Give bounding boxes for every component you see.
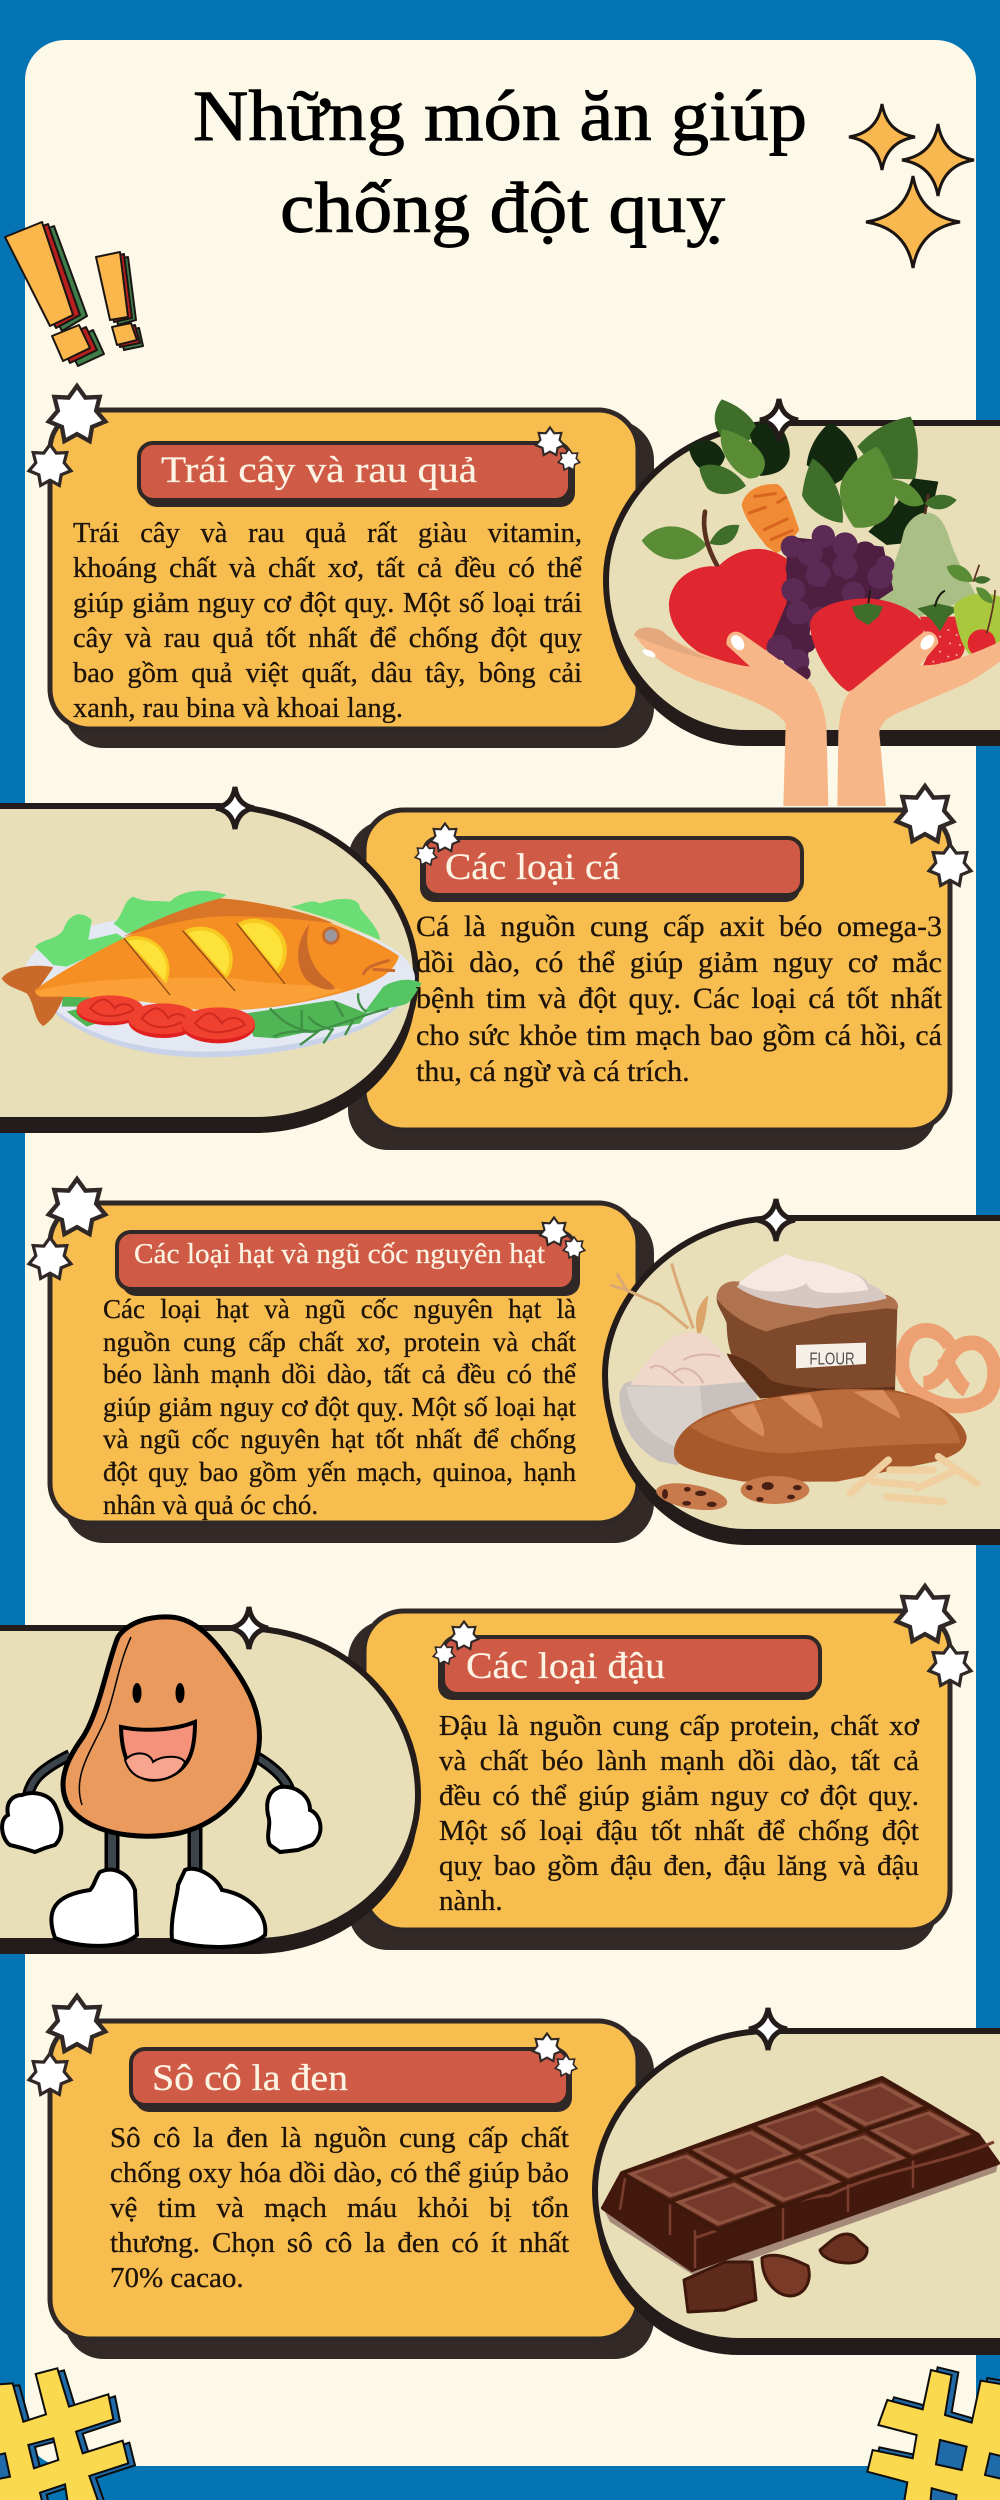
icon: small stars, grains card bbox=[540, 1218, 585, 1258]
illustration: flour sack, bread and grains: FLOUR bbox=[809, 1348, 855, 1368]
icon: large stars, chocolate card bbox=[29, 1996, 105, 2094]
text block: beans bbox=[438, 1710, 920, 1917]
picture frame: chocolate bbox=[595, 2031, 1000, 2355]
text block: nuts and grains: Các loại hạt và ngũ cốc nguyên hạt là bbox=[103, 1294, 576, 1324]
icon: frame sparkle bbox=[757, 1199, 795, 1241]
icon: small stars, fruit card bbox=[536, 428, 580, 470]
text block: fish: thu, cá ngừ và cá trích. bbox=[416, 1055, 690, 1088]
panel: fish card bbox=[348, 810, 950, 1150]
icon: large stars, grains card bbox=[29, 1179, 105, 1278]
icon: small stars, beans card bbox=[433, 1622, 478, 1664]
panel: fruit and vegetables card bbox=[50, 410, 654, 748]
text block: dark chocolate bbox=[110, 2122, 570, 2294]
text block: dark chocolate: Sô cô la đen là nguồn cung cấp chất bbox=[110, 2122, 569, 2154]
picture frame: grains bbox=[605, 1218, 1000, 1545]
text block: fruit and vegetables: bao gồm quả việt quất, dâu tây, bông cải bbox=[73, 658, 582, 689]
text block: nuts and grains: nhân và quả óc chó. bbox=[103, 1490, 318, 1520]
illustration: flour sack, bread and grains bbox=[610, 1254, 995, 1515]
text block: dark chocolate: 70% cacao. bbox=[110, 2262, 244, 2294]
title bbox=[193, 76, 807, 248]
icon: hash mark, bottom left bbox=[0, 2368, 135, 2500]
icon: small stars, fish card bbox=[415, 824, 459, 865]
icon: large stars, fruit card bbox=[29, 386, 105, 485]
panel: nuts and grains card bbox=[50, 1203, 654, 1543]
picture frame: beans bbox=[0, 1628, 418, 1954]
text block: nuts and grains: và ngũ cốc nguyên hạt tốt nhất để chống bbox=[103, 1424, 576, 1454]
text block: fruit and vegetables: cây và rau quả tốt nhất để chống đột quỵ bbox=[73, 623, 582, 654]
picture frame: fish bbox=[0, 806, 416, 1133]
panel: beans card bbox=[348, 1611, 950, 1950]
text block: beans: đều có thể giúp giảm nguy cơ đột quỵ. bbox=[439, 1780, 919, 1812]
text block: dark chocolate: vệ tim và mạch máu khỏi bị tổn bbox=[110, 2192, 569, 2224]
text block: fish: cho sức khỏe tim mạch bao gồm cá hồi, cá bbox=[416, 1019, 942, 1052]
text block: beans: nành. bbox=[439, 1885, 503, 1917]
title: chống đột quỵ bbox=[280, 168, 725, 248]
icon: large stars, beans card bbox=[897, 1586, 971, 1685]
text block: fish: Cá là nguồn cung cấp axit béo omega-3 bbox=[416, 910, 942, 943]
text block: nuts and grains: giúp giảm nguy cơ đột quỵ. Một số loại hạt bbox=[103, 1392, 576, 1422]
panel: nuts and grains card: Các loại hạt và ngũ cốc nguyên hạt bbox=[134, 1238, 545, 1270]
illustration: hands holding fruit bbox=[634, 399, 1000, 806]
text block: nuts and grains: nguồn cung cấp chất xơ, protein và chất bbox=[103, 1327, 576, 1357]
illustration: chocolate bar bbox=[603, 2078, 998, 2312]
text block: nuts and grains: đột quỵ bao gồm yến mạch, quinoa, hạnh bbox=[103, 1457, 576, 1487]
text block: fruit and vegetables: khoáng chất và chất xơ, tất cả đều có thể bbox=[73, 553, 582, 584]
icon: frame sparkle bbox=[230, 1607, 268, 1649]
text block: fish bbox=[416, 910, 942, 1088]
text block: beans: Đậu là nguồn cung cấp protein, chất xơ bbox=[439, 1710, 919, 1742]
panel: beans card: Các loại đậu bbox=[466, 1646, 665, 1687]
text block: nuts and grains: béo lành mạnh dồi dào, tất cả đều có thể bbox=[103, 1359, 576, 1389]
text block: fish: dồi dào, có thể giúp giảm nguy cơ mắc bbox=[416, 946, 942, 979]
icon: frame sparkle bbox=[760, 399, 798, 441]
picture frame: fruit and vegetables bbox=[606, 423, 1000, 746]
text block: beans: Một số loại đậu tốt nhất để chống đột bbox=[439, 1815, 919, 1847]
text block: beans: quỵ bao gồm đậu đen, đậu lăng và đậu bbox=[439, 1850, 919, 1882]
illustration: bean mascot bbox=[2, 1617, 320, 1947]
panel: fruit and vegetables card: Trái cây và rau quả bbox=[161, 450, 477, 491]
text block: dark chocolate: thương. Chọn sô cô la đen có ít nhất bbox=[110, 2227, 569, 2259]
panel: dark chocolate card bbox=[50, 2021, 654, 2359]
panel: fish card: Các loại cá bbox=[445, 847, 620, 888]
text block: fruit and vegetables: giúp giảm nguy cơ đột quỵ. Một số loại trái bbox=[73, 588, 582, 619]
icon: frame sparkle bbox=[749, 2008, 787, 2050]
illustration: grilled fish on plate bbox=[2, 891, 422, 1057]
icon: frame sparkle bbox=[216, 787, 254, 829]
icon: large stars, fish card bbox=[897, 786, 971, 885]
text block: fruit and vegetables: Trái cây và rau quả rất giàu vitamin, bbox=[73, 518, 582, 549]
text block: dark chocolate: chống oxy hóa dồi dào, có thể giúp bảo bbox=[110, 2157, 569, 2189]
text block: nuts and grains bbox=[102, 1294, 576, 1520]
title: Những món ăn giúp bbox=[193, 76, 807, 156]
text block: fruit and vegetables: xanh, rau bina và khoai lang. bbox=[73, 693, 403, 724]
text block: fish: bệnh tim và đột quỵ. Các loại cá tốt nhất bbox=[416, 982, 942, 1015]
icon: hash mark, bottom right bbox=[867, 2367, 1000, 2500]
icon: exclamation marks bbox=[5, 222, 143, 366]
panel: dark chocolate card: Sô cô la đen bbox=[152, 2058, 348, 2099]
text block: fruit and vegetables bbox=[72, 518, 582, 724]
icon: small stars, chocolate card bbox=[533, 2034, 577, 2076]
icon: gold sparkles bbox=[849, 104, 974, 268]
text block: beans: và chất béo lành mạnh dồi dào, tất cả bbox=[439, 1745, 919, 1777]
